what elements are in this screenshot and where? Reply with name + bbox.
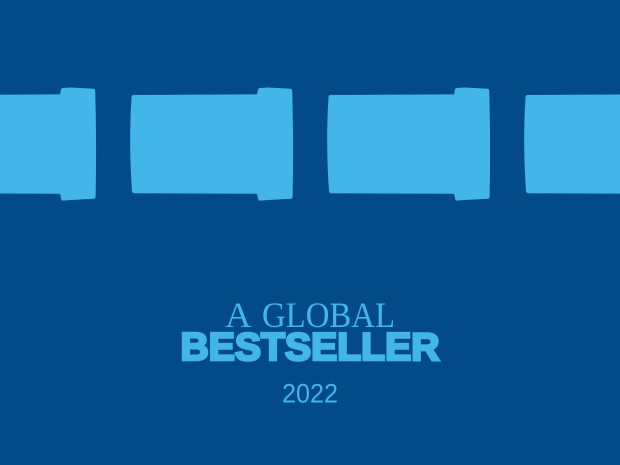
year: 2022: 2022 (282, 378, 338, 408)
heading: BESTSELLER: BESTSELLER (180, 326, 440, 369)
icon: capsule cut off at left edge (0, 88, 96, 201)
icon: capsule cut off at right edge (524, 88, 620, 201)
heading: A GLOBAL: A (225, 295, 252, 335)
heading: A GLOBAL: GLOBAL (262, 295, 395, 335)
icon: capsule 3 (327, 88, 490, 201)
icon: capsule 2 (130, 88, 293, 201)
